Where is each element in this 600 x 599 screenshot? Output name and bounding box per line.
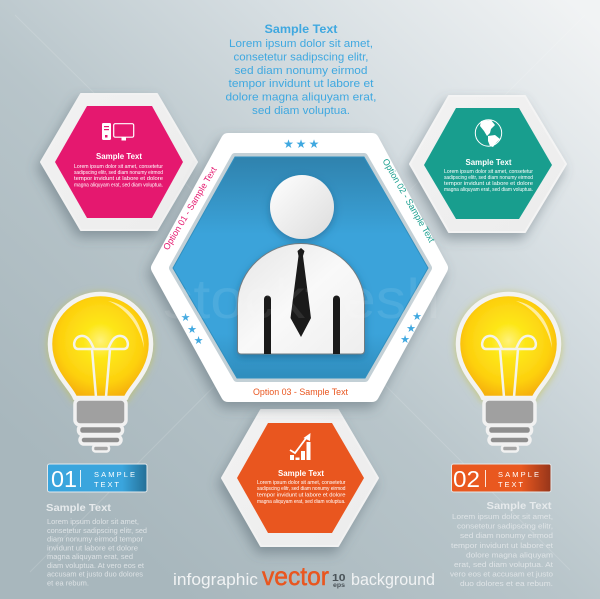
number 01: 01 [51, 466, 77, 492]
panel: label 02 [452, 464, 551, 492]
footer wordmark: 10 [332, 572, 346, 584]
body [238, 244, 364, 354]
title text block: Sample Text [264, 22, 338, 36]
pink body text: tempor invidunt ut labore et dolore [74, 176, 163, 182]
icon: computer [102, 123, 134, 140]
pink body text [74, 164, 163, 188]
left text block [46, 502, 147, 588]
teal body text: tempor invidunt ut labore et dolore [444, 181, 533, 187]
bulb glass [458, 294, 559, 398]
left text block: diam voluptua. At vero eos et [47, 561, 145, 570]
icon: growth chart [290, 433, 310, 460]
label text: TEXT [498, 480, 523, 489]
panel: teal hexagon [410, 96, 566, 232]
pink body text: sadipscing elitr, sed diam nonumy eirmod [74, 170, 163, 176]
label text: SAMPLE [94, 470, 135, 479]
right text block: sed diam nonumy eirmod [460, 531, 553, 540]
stars left: ★ [187, 324, 197, 336]
bulb glass [50, 294, 151, 398]
teal body text: Lorem ipsum dolor sit amet, consetetur [444, 169, 533, 175]
bulb base [484, 399, 535, 452]
tie [290, 248, 311, 337]
stars right: ★ [412, 311, 422, 323]
right text block: consetetur sadipscing elitr, [457, 522, 553, 530]
left text block: consetetur sadipscing elitr, sed [47, 526, 147, 535]
right text block: erat, sed diam voluptua. At [454, 560, 554, 569]
right text block: Sample Text [486, 500, 552, 512]
filament [74, 336, 128, 397]
number 02: 02 [453, 466, 480, 492]
footer wordmark: background [351, 571, 435, 589]
right text block: duo dolores et ea rebum. [460, 579, 553, 588]
stars left [181, 312, 204, 347]
bulb base [75, 399, 126, 452]
stars top [283, 137, 319, 151]
watermark: stockfresh [163, 267, 440, 330]
highlight [516, 301, 552, 348]
footer wordmark: vector [262, 561, 329, 591]
stars top: ★ [283, 137, 294, 151]
left text block: Sample Text [46, 502, 112, 514]
orange body text [257, 480, 346, 505]
pink heading: Sample Text [96, 151, 142, 161]
label text: TEXT [94, 480, 119, 489]
left text block: Lorem ipsum dolor sit amet, [47, 517, 139, 526]
panel: orange hexagon [222, 410, 378, 546]
blue hexagon fill [173, 157, 428, 378]
teal heading: Sample Text [466, 157, 512, 167]
panel: label 01 [48, 464, 147, 492]
left text block: accusam et justo duo dolores [47, 570, 143, 579]
orange body text: magna aliquyam erat, sed diam voluptua. [257, 499, 346, 505]
orange body text: Lorem ipsum dolor sit amet, consetetur [257, 480, 346, 486]
panel: central hexagon [158, 137, 441, 397]
label text [94, 470, 135, 489]
title text block [226, 22, 376, 117]
right text block [450, 500, 554, 588]
icon: globe [475, 120, 502, 147]
title text block: dolore magna aliquyam erat, [226, 92, 376, 104]
option 01 label: Option 01 - Sample Text [161, 165, 219, 252]
icon: left light bulb [50, 294, 151, 452]
orange body text: sadipscing elitr, sed diam nonumy eirmod [257, 486, 346, 492]
right text block: Lorem ipsum dolor sit amet, [452, 512, 553, 521]
teal body text: magna aliquyam erat, sed diam voluptua. [444, 187, 533, 193]
option 02 label: Option 02 - Sample Text [381, 157, 437, 245]
stars top: ★ [309, 137, 319, 151]
pink body text: Lorem ipsum dolor sit amet, consetetur [74, 164, 163, 170]
stars right [400, 311, 422, 346]
right text block: vero eos et accusam et justo [450, 570, 553, 578]
title text block: sed diam voluptua. [252, 105, 350, 117]
option 03 label: Option 03 - Sample Text [253, 387, 348, 397]
stars left: ★ [194, 335, 204, 347]
title text block: sed diam nonumy eirmod [234, 65, 368, 77]
teal body text: sadipscing elitr, sed diam nonumy eirmod [444, 175, 533, 181]
stars right: ★ [400, 334, 410, 346]
left arm line [264, 296, 271, 354]
right text block: tempor invidunt ut labore et [451, 541, 554, 550]
left text block: magna aliquyam erat, sed [47, 552, 133, 561]
person figure [238, 175, 364, 354]
teal body text [444, 169, 533, 193]
footer wordmark [173, 561, 435, 591]
label text [498, 470, 539, 489]
right arm line [333, 296, 340, 354]
left text block: invidunt ut labore et dolore [47, 543, 138, 552]
stars top: ★ [296, 137, 306, 151]
icon: right light bulb [458, 294, 559, 452]
stars right: ★ [406, 323, 416, 335]
right text block: dolore magna aliquyam [466, 550, 553, 559]
left text block: diam nonumy eirmod tempor [47, 534, 143, 544]
title text block: consetetur sadipscing elitr, [234, 52, 368, 64]
stars left: ★ [181, 312, 191, 324]
title text block: tempor invidunt ut labore et [228, 78, 374, 90]
title text block: Lorem ipsum dolor sit amet, [229, 38, 373, 50]
label text: SAMPLE [498, 470, 539, 479]
footer wordmark: eps [333, 583, 346, 589]
pink body text: magna aliquyam erat, sed diam voluptua. [74, 182, 163, 188]
highlight [108, 301, 144, 348]
panel: pink hexagon [41, 94, 197, 230]
orange body text: tempor invidunt ut labore et dolore [257, 492, 346, 498]
left text block: et ea rebum. [47, 578, 89, 588]
head [270, 175, 334, 239]
filament [482, 336, 536, 397]
footer wordmark: infographic [173, 571, 258, 589]
orange heading: Sample Text [278, 468, 324, 478]
